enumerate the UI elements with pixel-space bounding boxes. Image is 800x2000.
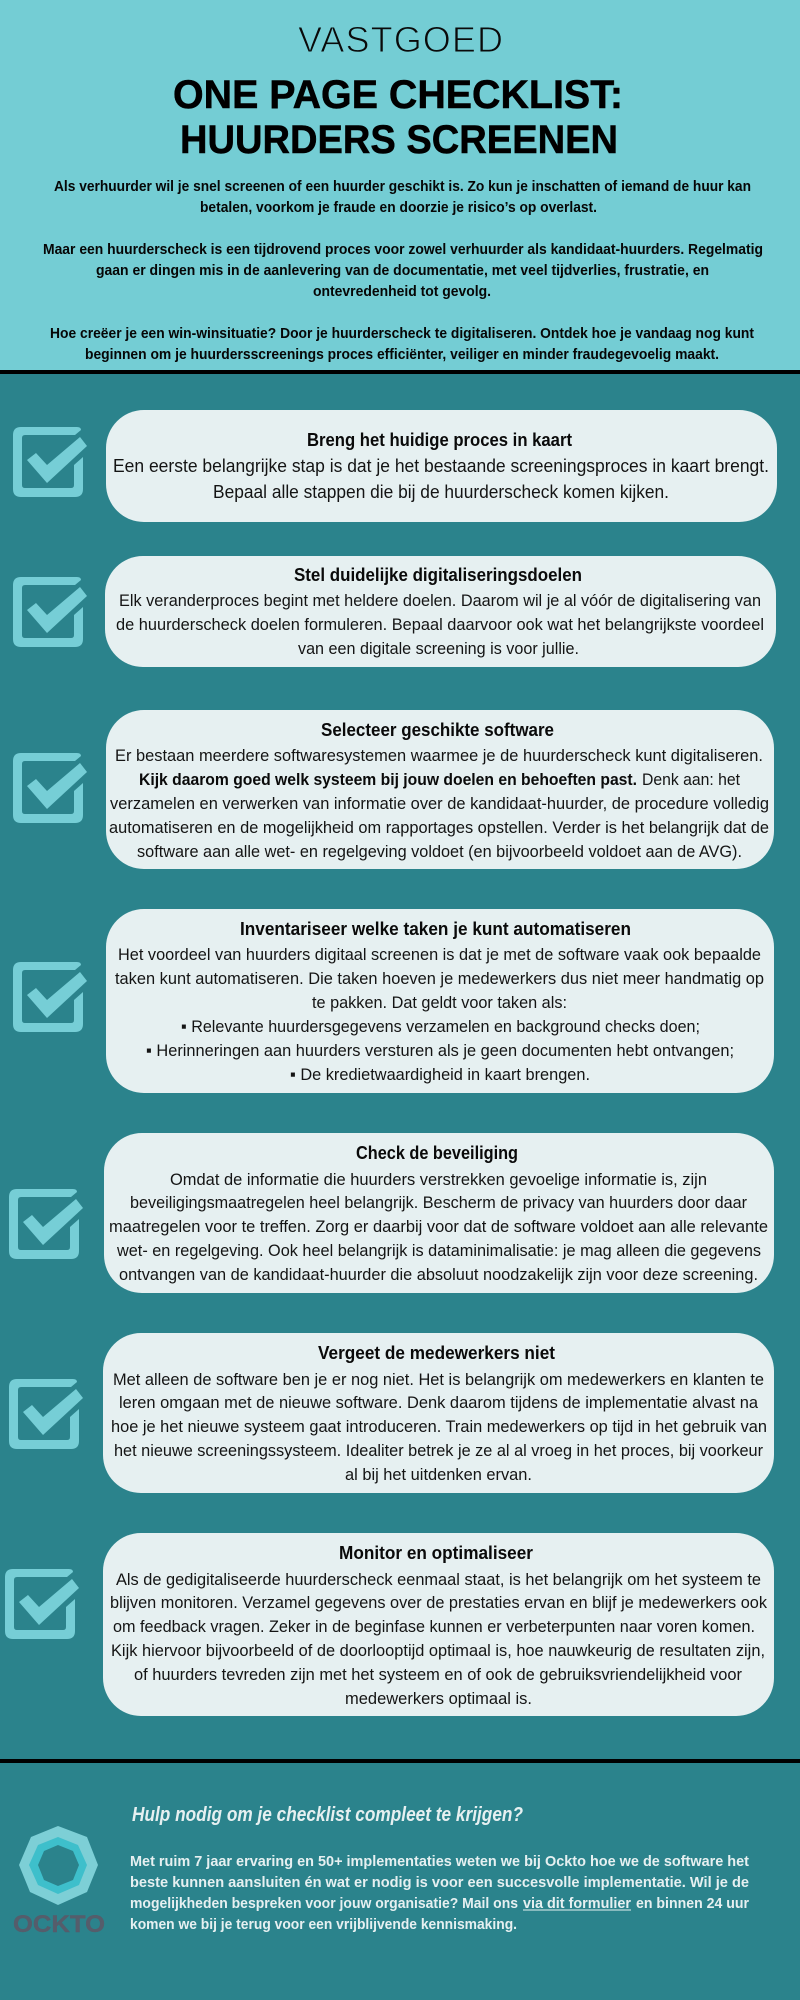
- card 3 body: automatiseren en de mogelijkheid om rapportages opstellen. Verder is het belangrijk dat de: [109, 818, 769, 837]
- footer body: Met ruim 7 jaar ervaring en 50+ implementaties weten we bij Ockto hoe we de software het: [130, 1853, 749, 1870]
- card 4 heading: Inventariseer welke taken je kunt automatiseren: [240, 919, 631, 939]
- card 3 heading: Selecteer geschikte software: [321, 720, 554, 740]
- card 2 body: de huurderscheck doelen formuleren. Bepaal daarvoor ook wat het belangrijkste voordeel: [116, 615, 764, 634]
- card 4 body: ▪ De kredietwaardigheid in kaart brengen.: [290, 1065, 590, 1084]
- card 4 body: ▪ Relevante huurdersgegevens verzamelen en background checks doen;: [181, 1017, 700, 1036]
- card 2 body: Elk veranderproces begint met heldere doelen. Daarom wil je al vóór de digitalisering van: [119, 591, 761, 610]
- card 2 body: van een digitale screening is voor jullie.: [298, 639, 579, 658]
- card 7 body: Kijk hiervoor bijvoorbeeld of de doorlooptijd optimaal is, hoe nauwkeurig de resultaten zijn,: [111, 1641, 765, 1660]
- card 4: taken automatiseren: [106, 909, 774, 1093]
- card 6 heading: Vergeet de medewerkers niet: [318, 1343, 555, 1363]
- card 1 body: Bepaal alle stappen die bij de huurderscheck komen kijken.: [213, 482, 669, 502]
- intro paragraph 3: Hoe creëer je een win-winsituatie? Door je huurderscheck te digitaliseren. Ontdek hoe je vandaag nog kunt: [50, 325, 754, 342]
- intro paragraph 2: ontevredenheid tot gevolg.: [313, 283, 491, 300]
- card 4 body: [115, 945, 764, 1084]
- card 4 body: Het voordeel van huurders digitaal screenen is dat je met de software vaak ook bepaalde: [118, 945, 761, 964]
- card 4 body: te pakken. Dat geldt voor taken als:: [312, 993, 567, 1012]
- card 7 body: blijven monitoren. Verzamel gegevens over de prestaties ervan en blijf je medewerkers ook: [110, 1593, 767, 1612]
- intro paragraph 1: betalen, voorkom je fraude en doorzie je risico’s op overlast.: [200, 199, 597, 216]
- card 5 body: [109, 1170, 768, 1284]
- card 1 body: [113, 456, 769, 502]
- card 5: beveiliging: [104, 1133, 774, 1293]
- panel: header: [0, 0, 800, 370]
- footer body: via dit formulier: [523, 1895, 631, 1912]
- icon: checkbox 1: [13, 427, 87, 497]
- card 2 body: [116, 591, 764, 658]
- icon: checkbox 3: [13, 753, 87, 823]
- card 1: proces in kaart: [106, 410, 777, 522]
- card 3 body: Kijk daarom goed welk systeem bij jouw doelen en behoeften past.: [139, 770, 637, 789]
- card 7 body: [110, 1570, 767, 1708]
- card 6 body: al bij het uitdenken ervan.: [345, 1465, 532, 1484]
- card 6 body: leren omgaan met de nieuwe software. Denk daarom tijdens de implementatie alvast na: [119, 1393, 759, 1412]
- title: HUURDERS SCREENEN: [180, 118, 618, 162]
- footer body: en binnen 24 uur: [636, 1895, 749, 1912]
- intro paragraph 2: Maar een huurderscheck is een tijdrovend proces voor zowel verhuurder als kandidaat-huurders. Regelmatig: [43, 241, 763, 258]
- card 2: digitaliseringsdoelen: [105, 556, 776, 667]
- card 5 body: ontvangen van de kandidaat-huurder die absoluut noodzakelijk zijn voor deze screening.: [119, 1265, 758, 1284]
- divider: top black line: [0, 370, 800, 374]
- card 3 body: software aan alle wet- en regelgeving voldoet (en bijvoorbeeld voldoet aan de AVG).: [137, 842, 742, 861]
- footer body: [130, 1853, 749, 1933]
- intro paragraph 1: Als verhuurder wil je snel screenen of een huurder geschikt is. Zo kun je inschatten of iemand de huur kan: [54, 178, 751, 195]
- icon: checkbox 4: [13, 962, 87, 1032]
- card 1 heading: Breng het huidige proces in kaart: [307, 430, 572, 450]
- intro paragraph 3: beginnen om je huurdersscreenings proces efficiënter, veiliger en minder fraudegevoelig maakt.: [85, 346, 719, 363]
- card 2 heading: Stel duidelijke digitaliseringsdoelen: [294, 565, 582, 585]
- logo: Ockto: [13, 1826, 105, 1938]
- card 3 body: verzamelen en verwerken van informatie over de kandidaat-huurder, de procedure volledig: [110, 794, 769, 813]
- card 7 body: medewerkers optimaal is.: [345, 1689, 532, 1708]
- card 7 heading: Monitor en optimaliseer: [339, 1543, 533, 1563]
- card 3 body: Denk aan: het: [642, 770, 740, 789]
- card 5 heading: Check de beveiliging: [356, 1143, 518, 1163]
- intro paragraph 2: gaan er dingen mis in de aanlevering van de documentatie, met veel tijdverlies, frustratie, en: [96, 262, 709, 279]
- footer body: beste kunnen aansluiten én wat er nodig is voor een succesvolle implementatie. Wil je de: [130, 1874, 749, 1891]
- title: [173, 73, 623, 162]
- card 7: monitoren: [103, 1533, 774, 1716]
- card 1 body: Een eerste belangrijke stap is dat je het bestaande screeningsproces in kaart brengt.: [113, 456, 769, 476]
- card 5 body: wet- en regelgeving. Ook heel belangrijk is dataminimalisatie: je mag alleen die gegevens: [116, 1241, 761, 1260]
- icon: checkbox 2: [13, 577, 87, 647]
- footer body: mogelijkheden bespreken voor jouw organisatie? Mail ons: [130, 1895, 518, 1912]
- card 3: geschikte software: [106, 710, 774, 869]
- icon: checkbox 7: [5, 1569, 79, 1639]
- card 5 body: maatregelen voor te treffen. Zorg er daarbij voor dat de software voldoet aan alle relevante: [109, 1217, 768, 1236]
- card 4 body: ▪ Herinneringen aan huurders versturen als je geen documenten hebt ontvangen;: [146, 1041, 734, 1060]
- intro paragraph 1: [54, 178, 751, 216]
- eyebrow: vastgoed: VASTGOED: [298, 19, 503, 60]
- card 5 body: Omdat de informatie die huurders verstrekken gevoelige informatie is, zijn: [170, 1170, 707, 1189]
- logo: Ockto: OCKTO: [13, 1911, 105, 1938]
- footer body: komen we bij je terug voor een vrijblijvende kennismaking.: [130, 1916, 517, 1933]
- card 5 body: beveiligingsmaatregelen heel belangrijk. Bescherm de privacy van huurders door daar: [130, 1193, 747, 1212]
- card 6 body: [111, 1370, 767, 1484]
- card 6 body: het nieuwe screeningssysteem. Idealiter betrek je ze al al vroeg in het proces, bij voorkeur: [114, 1441, 763, 1460]
- card 3 body: Er bestaan meerdere softwaresystemen waarmee je de huurderscheck kunt digitaliseren.: [115, 746, 763, 765]
- card 6 body: Met alleen de software ben je er nog niet. Het is belangrijk om medewerkers en klanten te: [113, 1370, 764, 1389]
- icon: checkbox 6: [9, 1379, 83, 1449]
- intro paragraph 3: [50, 325, 754, 363]
- divider: bottom black line: [0, 1759, 800, 1763]
- footer heading: Hulp nodig om je checklist compleet te krijgen?: [132, 1804, 523, 1826]
- card 7 body: Als de gedigitaliseerde huurderscheck eenmaal staat, is het belangrijk om het systeem te: [116, 1570, 761, 1589]
- card 3 body: [109, 746, 769, 861]
- card 4 body: taken kunt automatiseren. Die taken hoeven je medewerkers dus niet meer handmatig op: [115, 969, 764, 988]
- title: ONE PAGE CHECKLIST:: [173, 73, 623, 117]
- intro paragraph 2: [43, 241, 763, 300]
- card 7 body: of huurders tevreden zijn met het systeem en of ook de gebruiksvriendelijkheid voor: [134, 1665, 742, 1684]
- icon: checkbox 5: [9, 1189, 83, 1259]
- card 7 body: om feedback vragen. Zeker in de beginfase kunnen er verbeterpunten naar voren komen.: [113, 1617, 755, 1636]
- footer call to action: [130, 1804, 749, 1933]
- card 6: medewerkers: [103, 1333, 774, 1493]
- card 6 body: hoe je het nieuwe systeem gaat introduceren. Train medewerkers op tijd in het gebruik van: [111, 1417, 767, 1436]
